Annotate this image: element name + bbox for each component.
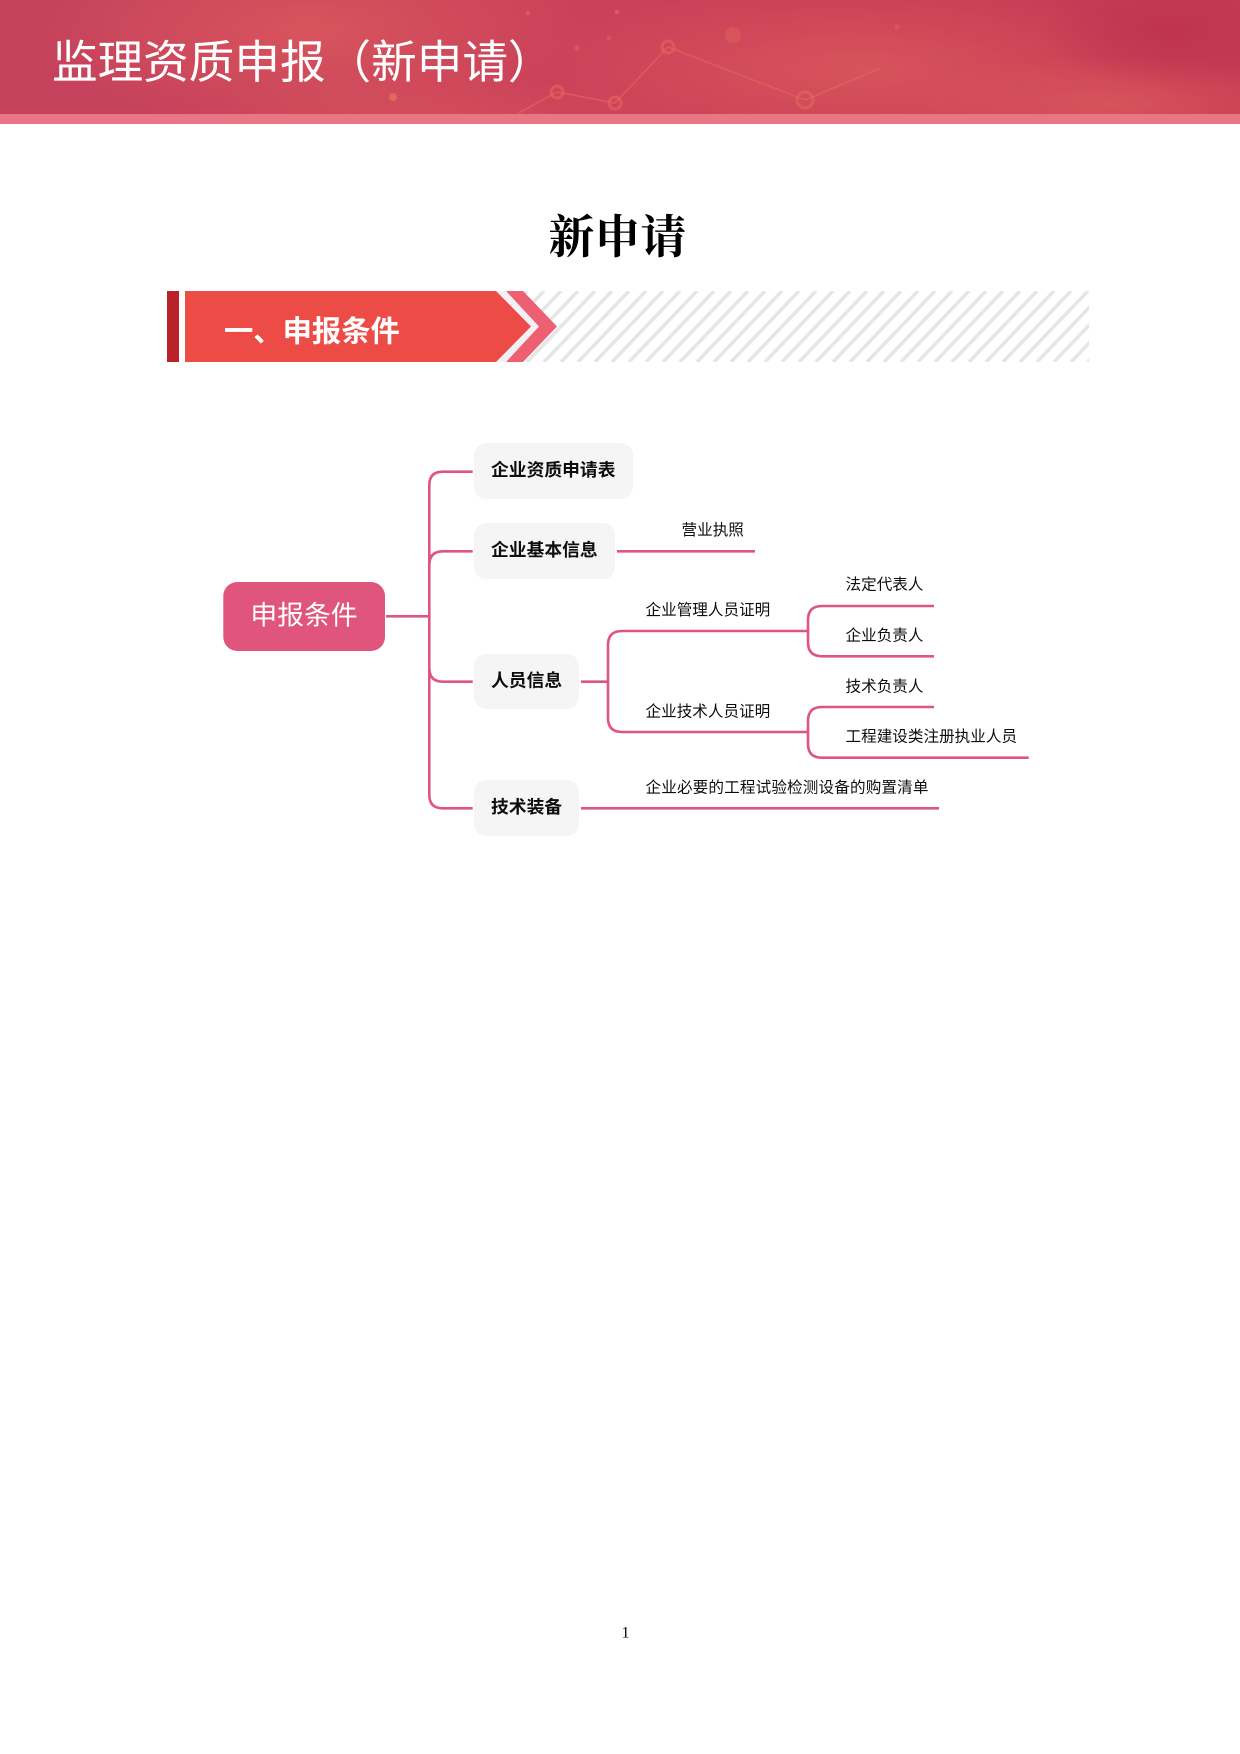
connector lines <box>386 472 1029 808</box>
section heading: 一、申报条件 <box>224 316 400 348</box>
node: 企业资质申请表: 企业资质申请表 <box>491 459 616 480</box>
main title: 新申请 <box>548 212 686 263</box>
node: 人员信息 <box>474 654 579 709</box>
header bottom strip <box>0 114 1240 124</box>
node: 技术装备 <box>474 780 579 836</box>
pink chevron <box>506 291 557 362</box>
leaf labels: 技术负责人 <box>846 678 924 696</box>
leaf labels <box>646 521 1017 796</box>
node: 技术装备: 技术装备 <box>491 797 562 817</box>
header title: 监理资质申报（新申请） <box>52 37 554 88</box>
leaf labels: 企业负责人 <box>846 626 924 644</box>
network line decoration <box>389 10 900 114</box>
node: 企业基本信息: 企业基本信息 <box>491 539 598 560</box>
dark red accent bar <box>167 291 179 362</box>
leaf labels: 企业管理人员证明 <box>646 601 770 619</box>
stripe background <box>520 291 1089 362</box>
root node <box>223 582 385 651</box>
section banner: 申报条件 <box>167 291 1089 362</box>
node: 企业基本信息 <box>474 523 615 579</box>
header banner <box>0 0 1240 124</box>
red label shape <box>185 291 531 362</box>
page number: 1 <box>622 1624 630 1642</box>
leaf labels: 工程建设类注册执业人员 <box>846 728 1017 746</box>
leaf labels: 企业必要的工程试验检测设备的购置清单 <box>646 778 928 796</box>
leaf labels: 法定代表人 <box>846 576 924 594</box>
node: 人员信息: 人员信息 <box>491 670 562 690</box>
root node: 申报条件 <box>250 600 358 630</box>
node: 企业资质申请表 <box>474 443 633 499</box>
leaf labels: 营业执照 <box>682 521 744 539</box>
chevron gap <box>496 291 541 362</box>
leaf labels: 企业技术人员证明 <box>646 702 770 720</box>
mind map <box>223 443 1029 836</box>
